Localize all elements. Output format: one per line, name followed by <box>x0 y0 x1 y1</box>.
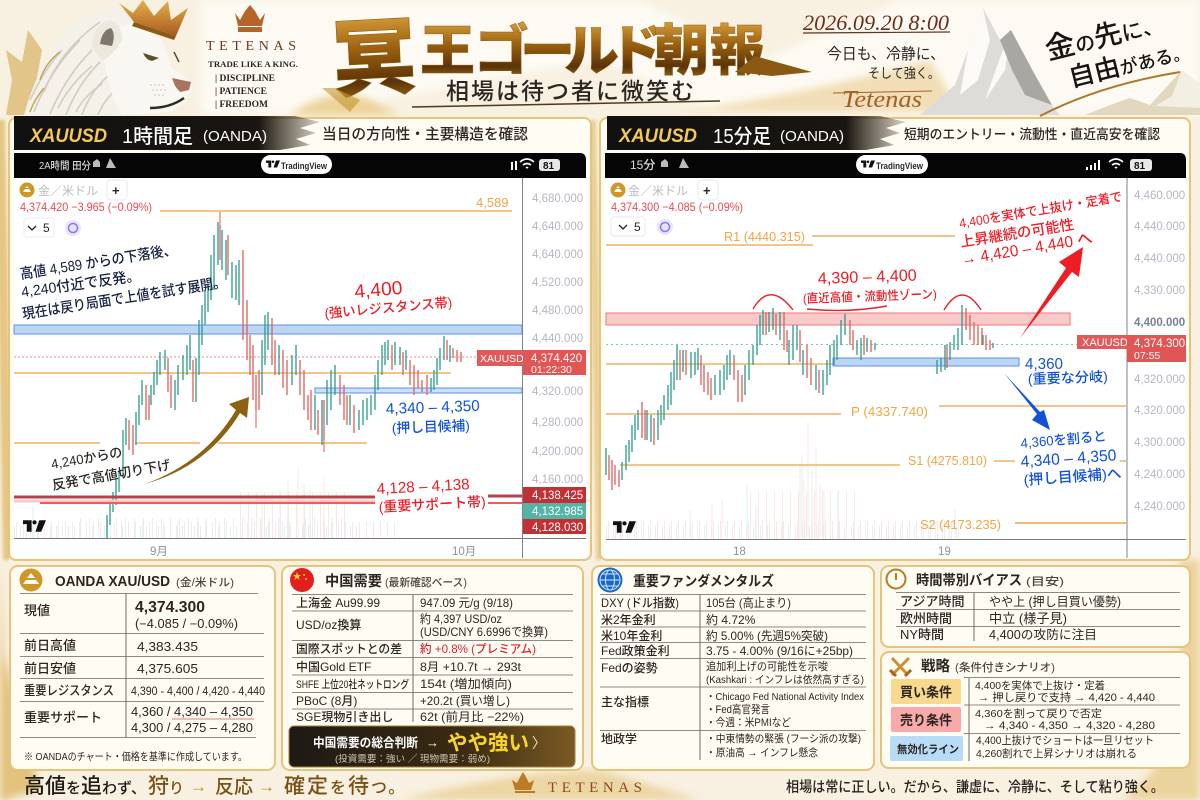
price tag: XAUUSD <box>1082 337 1128 349</box>
title: 冥王ゴールド朝報 <box>322 10 812 112</box>
axes <box>606 178 1186 558</box>
annotation: 4,390-4,400 zone <box>803 267 937 306</box>
phone status bar: 81 <box>1134 161 1146 172</box>
arrow: gold rebound arrow <box>145 397 249 484</box>
brand block: TETENAS <box>206 5 298 109</box>
table: fundamentals: DXY (ドル指数) <box>601 595 679 610</box>
table: scenarios: 4,360を割って戻りで否定 <box>975 708 1103 720</box>
date and message: Tetenas <box>842 87 922 113</box>
table: fundamentals: Fed政策金利 <box>601 643 670 658</box>
table: prices: 4,390 - 4,400 / 4,420 - 4,440 <box>131 686 265 698</box>
table: fundamentals: 主な指標 <box>601 694 649 709</box>
table: prices: 4,383.435 <box>137 639 198 654</box>
annotation: 4,390-4,400 zone: (直近高値・流動性ゾーン) <box>803 286 937 306</box>
icon: snowy mountains <box>920 8 1200 115</box>
panel: time-of-day bias <box>881 566 1190 647</box>
table: fundamentals: 約 4.72% <box>706 612 756 627</box>
title: 冥王ゴールド朝報: 王ゴールド朝報 <box>420 20 765 82</box>
table: fundamentals: ・中東情勢の緊張 (フーシ派の攻撃) <box>706 732 861 745</box>
table: fundamentals: 105台 (高止まり) <box>706 595 791 610</box>
footnote: ※ OANDAのチャート・価格を基準に作成しています。 <box>24 750 247 763</box>
table: scenarios: → 押し戻りで支持 → 4,420 - 4,440 <box>978 690 1155 704</box>
annotation: 4,128-4,138 support: (重要サポート帯) <box>378 493 486 515</box>
table: demand metrics: 154t (増加傾向) <box>420 676 512 691</box>
axis labels: 4,440.000 <box>532 333 583 345</box>
footer: TETENAS brand: TETENAS <box>548 780 642 796</box>
note: market narrative: 現在は戻り局面で上値を試す展開。 <box>21 274 227 323</box>
heading: 重要ファンダメンタルズ <box>633 573 774 589</box>
footer: motto: → <box>190 777 207 796</box>
slogan: 金の先に、自由がある。: 金の先に、 <box>1042 6 1165 67</box>
table: prices: 4,300 / 4,275 – 4,280 <box>131 721 253 735</box>
annotation: 4,340-4,350 pullback: (押し目候補) <box>392 417 470 436</box>
annotation: 4,360 branch: 4,360 <box>1025 356 1063 373</box>
table: demand metrics: 約 4,397 USD/oz <box>420 611 502 626</box>
candlesticks <box>606 305 993 490</box>
annotation: rebound from 4,240: 反発で高値切り下げ <box>51 456 172 493</box>
phone status bar: TradingView <box>281 161 327 172</box>
table: prices <box>20 594 265 738</box>
annotation: downside scenario: 4,360を割ると <box>1020 428 1107 451</box>
phone status bar: 2A時間 田分 <box>39 159 91 172</box>
icon: China flag <box>290 568 314 592</box>
button: buy <box>891 679 961 704</box>
axis labels: 4,320.000 <box>1134 405 1185 417</box>
axis labels: 9月 <box>150 546 168 558</box>
table: scenarios: 4,400上抜けでショートは一旦リセット <box>976 733 1154 747</box>
callout: overall verdict: 〉 <box>532 735 546 751</box>
annotation: 4,340-4,350 pullback: 4,340 – 4,350 <box>386 398 480 418</box>
candlesticks <box>107 212 461 538</box>
table: scenarios: 4,400を実体で上抜け・定着 <box>975 679 1105 692</box>
icon: crossed swords <box>890 658 911 676</box>
table: sessions: 欧州時間 <box>900 611 952 626</box>
axis labels: 4,330.000 <box>1134 285 1185 297</box>
table: prices: 4,375.605 <box>137 661 198 676</box>
phone status bar <box>14 153 586 178</box>
axis labels: 4,440.000 <box>1134 221 1185 233</box>
axis labels: 4,240.000 <box>1134 501 1185 513</box>
annotation: 4,400 resistance: 4,400 <box>354 278 403 303</box>
price tags: 4,132.985 <box>532 506 583 518</box>
axis labels: 18 <box>733 546 746 558</box>
arrow: blue downside <box>1004 373 1050 430</box>
chart: XAUUSD 1 hour <box>14 153 586 558</box>
price tag: 4,374.300 <box>1134 338 1185 350</box>
table: demand metrics: SGE現物引き出し <box>296 709 393 724</box>
resistance band 4,400 <box>14 325 522 334</box>
table: demand metrics: 上海金 Au99.99 <box>296 595 380 610</box>
arrow: red upside <box>1020 247 1083 338</box>
logo: TradingView mark <box>613 521 636 533</box>
label: 4,589: 4,589 <box>476 195 509 210</box>
annotation: upside scenario: 上昇継続の可能性 <box>959 215 1075 251</box>
table: scenarios: → 4,340 - 4,350 → 4,320 - 4,280 <box>984 720 1155 732</box>
table: prices: 前日安値 <box>24 661 76 676</box>
table: demand metrics: 62t (前月比 −22%) <box>420 709 524 724</box>
section header: 15分足: (OANDA) <box>780 128 844 145</box>
table: demand metrics: 947.09 元/g (9/18) <box>420 596 513 610</box>
annotation: downside scenario: (押し目候補)へ <box>1023 465 1122 489</box>
icon: crown logo <box>235 5 265 32</box>
axis labels: 4,200.000 <box>532 446 583 458</box>
resistance zone 4,390-4,400 <box>606 313 1070 325</box>
table: fundamentals: 3.75 - 4.00% (9/16に+25bp) <box>706 644 853 658</box>
heading <box>325 573 467 590</box>
section header: 15分足: XAUUSD <box>618 125 697 147</box>
axis labels: 4,440.000 <box>1134 253 1185 265</box>
price tag <box>1077 335 1186 362</box>
axis labels: 4,480.000 <box>532 305 583 317</box>
axis labels: 4,320.000 <box>1134 374 1185 386</box>
table: fundamentals: ・今週：米PMIなど <box>706 715 791 729</box>
callout: overall verdict: やや強い <box>447 732 529 755</box>
axis labels: 4,280.000 <box>532 417 583 429</box>
legend: symbol and price: 5 <box>43 221 50 235</box>
price tag: 07:55 <box>1134 350 1160 362</box>
slogan: 金の先に、自由がある。 <box>1042 1 1191 97</box>
footer: motto: 確定を待つ。 <box>284 775 406 798</box>
table: demand metrics: 国際スポットとの差 <box>296 642 402 656</box>
table: fundamentals: Fedの姿勢 <box>601 660 658 675</box>
note: market narrative: 高値 4,589 からの下落後、 <box>19 241 178 283</box>
annotation: downside scenario <box>1020 428 1122 489</box>
table: prices: 4,374.300 <box>135 599 205 616</box>
legend: symbol and price: 金／米ドル <box>628 184 688 198</box>
footer: motto: → <box>258 777 275 796</box>
title: 冥王ゴールド朝報: 冥 <box>330 10 419 108</box>
callout: overall verdict: 中国需要の総合判断 <box>313 735 418 750</box>
button: sell: 売り条件 <box>900 712 952 728</box>
icon: clock <box>886 570 906 588</box>
section header: 15分足: 短期のエントリー・流動性・直近高安を確認 <box>904 126 1160 142</box>
heading: OANDA XAU/USD <box>55 574 170 590</box>
axis labels: 4,320.000 <box>532 386 583 398</box>
table: sessions: アジア時間 <box>900 594 964 609</box>
button: sell <box>891 707 961 732</box>
pivot labels: S2 (4173.235) <box>920 518 1001 532</box>
legend: symbol and price: 5 <box>634 220 641 234</box>
icon: crowned white lion <box>6 0 192 115</box>
price levels <box>14 211 512 443</box>
highlight arcs <box>753 295 981 310</box>
slogan: 金の先に、自由がある。: 自由がある。 <box>1065 34 1191 93</box>
support band 4,340-4,350 <box>315 388 522 393</box>
callout: overall verdict <box>289 726 575 767</box>
button: invalidation: 無効化ライン <box>897 742 959 756</box>
footer: motto: 反応 <box>215 776 253 798</box>
lion face <box>104 24 192 115</box>
table: prices: 4,360 / 4,340 – 4,350 <box>131 705 253 719</box>
legend: symbol and price: + <box>112 183 120 198</box>
legend: symbol and price: + <box>703 183 711 198</box>
legend: symbol and price: 金／米ドル <box>38 184 98 198</box>
table: prices: 現値 <box>24 603 50 618</box>
date and message <box>803 10 950 113</box>
logo: TradingView mark <box>23 520 46 532</box>
table: demand metrics: +20.2t (買い増し) <box>420 694 510 708</box>
section header: 1時間足: XAUUSD <box>29 125 107 147</box>
table: demand metrics: 8月 +10.7t → 293t <box>420 660 522 674</box>
heading: 中国需要 <box>325 573 382 590</box>
axis labels: 19 <box>938 546 951 558</box>
heading <box>55 574 234 590</box>
axis labels: 4,680.000 <box>532 193 583 205</box>
table: fundamentals: ・Fed高官発言 <box>706 702 770 716</box>
table: demand metrics <box>292 594 573 724</box>
table: prices: 重要レジスタンス <box>24 683 114 698</box>
legend: symbol and price: 4,374.420 −3.965 (−0.09%) <box>20 200 152 214</box>
pivot labels: R1 (4440.315) <box>724 230 805 244</box>
panel: OANDA XAU/USD <box>10 566 275 770</box>
footer: motto <box>24 775 406 798</box>
phone status bar: 81 <box>543 161 555 172</box>
table: demand metrics: 中国Gold ETF <box>296 659 371 674</box>
table: demand metrics: (USD/CNY 6.6996で換算) <box>420 624 548 639</box>
annotation: downside scenario: 4,340 – 4,350 <box>1020 447 1117 471</box>
annotation: 4,400 resistance <box>324 278 453 321</box>
section header: 1時間足: (OANDA) <box>203 128 267 145</box>
axis labels: 4,640.000 <box>532 249 583 261</box>
note: market narrative: 4,240付近で反発。 <box>20 267 141 301</box>
heading: (条件付きシナリオ) <box>955 660 1055 674</box>
table: fundamentals <box>600 594 866 760</box>
section header: 1時間足: 当日の方向性・主要構造を確認 <box>322 125 528 143</box>
phone status bar: TradingView <box>876 161 924 172</box>
brand block: TETENAS: TETENAS <box>206 39 296 54</box>
table: fundamentals: (Kashkari : インフレは依然高すぎる) <box>706 673 864 686</box>
axis labels: 4,400.000 <box>1134 317 1185 329</box>
annotation: upside scenario: 4,400を実体で上抜け・定着で <box>958 189 1123 231</box>
callout: overall verdict: → <box>426 735 439 750</box>
callout: overall verdict: (投資需要：強い ／ 現物需要：弱め) <box>335 753 490 765</box>
panel: 15-minute chart <box>600 116 1190 560</box>
brand block: TETENAS: | FREEDOM <box>215 99 269 109</box>
table: fundamentals: 約 5.00% (先週5%突破) <box>706 628 828 643</box>
price tags <box>477 350 586 534</box>
slogan underline <box>1040 72 1180 116</box>
icon: globe <box>598 568 622 592</box>
axis labels: 4,240.000 <box>1134 469 1185 481</box>
table: fundamentals: ・Chicago Fed National Activity Index <box>706 692 864 703</box>
annotation: 4,360 branch <box>1025 356 1108 387</box>
price tags: XAUUSD <box>480 353 524 365</box>
volume bars <box>606 422 960 538</box>
date and message: 今日も、冷静に、 <box>827 45 945 63</box>
pivot labels <box>724 230 1001 532</box>
table: sessions <box>896 592 1180 642</box>
price tags: 4,374.420 <box>531 353 582 365</box>
legend: symbol and price: 4,374.300 −4.085 (−0.09%) <box>611 200 743 214</box>
panel: 1-hour chart <box>9 116 591 560</box>
panel: strategy <box>881 652 1190 768</box>
annotation: 4,400 resistance: (強いレジスタンス帯) <box>324 295 453 321</box>
table: prices: 重要サポート <box>24 710 102 725</box>
panel: key fundamentals <box>592 566 874 770</box>
annotation: upside scenario: → 4,420 – 4,440 へ <box>960 230 1094 269</box>
pivot labels: P (4337.740) <box>851 405 928 419</box>
table: scenarios <box>890 678 1180 761</box>
table: fundamentals: 米2年金利 <box>601 612 656 627</box>
table: demand metrics: PBoC (8月) <box>296 694 357 708</box>
table: sessions: やや上 (押し目買い優勢) <box>989 594 1121 609</box>
heading: 時間帯別バイアス <box>916 572 1022 588</box>
axis labels: 4,520.000 <box>532 277 583 289</box>
axis labels: 4,640.000 <box>532 221 583 233</box>
strong support band 4,128-4,138 <box>14 496 522 503</box>
axis labels: 4,300.000 <box>1134 437 1185 449</box>
table: prices: 前日高値 <box>24 638 76 653</box>
section header: 1時間足: 1時間足 <box>122 125 193 148</box>
footer: motto: 高値を追わず、 <box>24 775 146 798</box>
table: sessions: NY時間 <box>900 627 944 642</box>
date and message: そして強く。 <box>868 66 940 81</box>
section header: 15分足 <box>607 116 1160 150</box>
heading: (目安) <box>1026 574 1064 588</box>
price tags: 4,138.425 <box>532 490 583 502</box>
button: invalidation <box>890 736 963 761</box>
pivot lines <box>606 236 1126 523</box>
table: fundamentals: 追加利上げの可能性を示唆 <box>706 659 828 673</box>
annotation: upside scenario <box>958 189 1123 269</box>
annotation: 4,360 branch: (重要な分岐) <box>1028 368 1108 387</box>
annotation: 4,390-4,400 zone: 4,390 – 4,400 <box>818 267 917 288</box>
footer: motto: 狩り <box>148 775 184 798</box>
annotation: 4,128-4,138 support <box>376 476 486 515</box>
heading <box>921 657 1055 675</box>
note: market narrative <box>19 241 227 323</box>
subtitle: 相場は待つ者に微笑む <box>446 78 694 104</box>
table: fundamentals: 米10年金利 <box>601 628 662 643</box>
icon: gold crown on lion <box>119 0 188 36</box>
axes <box>14 178 586 558</box>
axis labels: 10月 <box>452 546 476 558</box>
table: demand metrics: 約 +0.8% (プレミアム) <box>420 641 536 656</box>
legend: symbol and price <box>610 180 743 236</box>
footer: closing message: 相場は常に正しい。だから、謙虚に、冷静に、そして粘り強く。 <box>786 778 1164 796</box>
pivot labels: S1 (4275.810) <box>908 454 987 468</box>
table: scenarios: 4,260割れで上昇シナリオは崩れる <box>976 747 1137 760</box>
table: prices: (−4.085 / −0.09%) <box>135 617 238 631</box>
last-price dotted line <box>606 344 1077 346</box>
heading: (最新確認ベース) <box>385 575 467 589</box>
table: fundamentals: ・原油高 → インフレ懸念 <box>706 746 818 759</box>
axis labels <box>150 193 583 558</box>
section header: 1時間足 <box>14 116 528 150</box>
volume bars <box>14 467 400 538</box>
heading: 戦略 <box>921 657 950 675</box>
annotation: rebound from 4,240: 4,240からの <box>50 445 123 472</box>
chart: XAUUSD 15 minute <box>605 153 1186 558</box>
phone status bar: 15分 <box>630 158 655 172</box>
price tags: 01:22:30 <box>531 364 572 376</box>
brand block: TETENAS: TRADE LIKE A KING. <box>208 59 298 69</box>
table: sessions: 4,400の攻防に注目 <box>989 627 1097 642</box>
annotation: 4,128-4,138 support: 4,128 – 4,138 <box>376 476 470 498</box>
heading: (金/米ドル) <box>176 575 234 589</box>
brand block: TETENAS: | DISCIPLINE <box>215 73 275 83</box>
annotation: 4,340-4,350 pullback <box>386 398 480 436</box>
table: demand metrics: USD/oz換算 <box>296 617 361 632</box>
table: sessions: 中立 (様子見) <box>989 611 1067 626</box>
brand block: TETENAS: | PATIENCE <box>215 86 267 96</box>
section header: 15分足: 15分足 <box>713 125 771 148</box>
table: fundamentals: 地政学 <box>601 731 637 746</box>
phone status bar <box>605 153 1186 178</box>
table: demand metrics: SHFE 上位20社ネットロング <box>296 677 409 691</box>
axis labels: 4,460.000 <box>1134 190 1185 202</box>
date and message: 2026.09.20 8:00 <box>803 10 949 35</box>
footer: TETENAS brand <box>512 772 642 796</box>
legend: symbol and price <box>20 180 152 237</box>
icon: gold coin <box>20 568 42 592</box>
panel: China demand <box>282 566 583 770</box>
price tags: 4,128.030 <box>532 522 583 534</box>
button: buy: 買い条件 <box>900 684 952 700</box>
axis labels: 4,160.000 <box>532 474 583 486</box>
axis labels <box>733 190 1185 558</box>
branch band 4,360 <box>833 358 1019 366</box>
